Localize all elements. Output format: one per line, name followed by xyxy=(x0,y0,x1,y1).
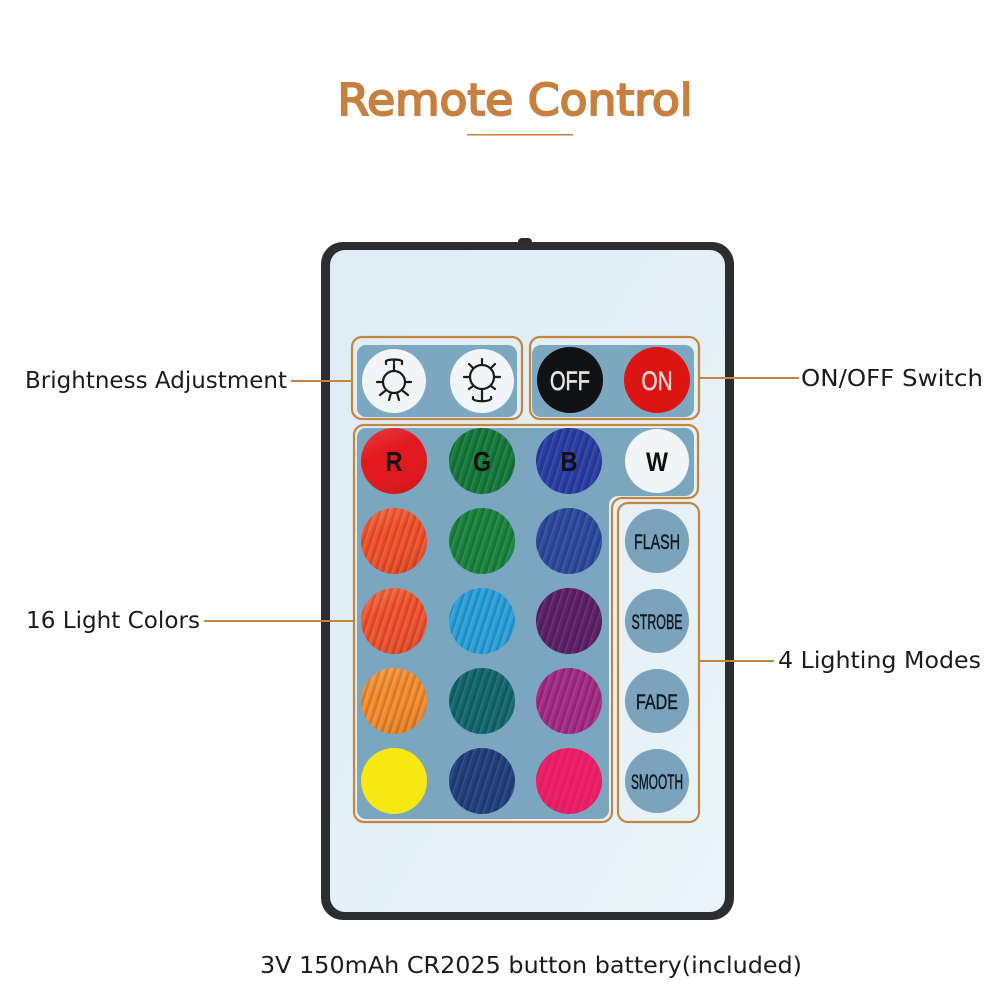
callout: 4 lighting modes: 4 Lighting Modes xyxy=(778,648,981,674)
callout: 16 light colors: 16 Light Colors xyxy=(26,608,200,634)
icon: brightness up button xyxy=(362,349,426,413)
button: B xyxy=(536,428,602,494)
button: FLASH: FLASH xyxy=(634,531,680,554)
panel: 4 lighting modes xyxy=(618,503,699,822)
callout: on/off switch: ON/OFF Switch xyxy=(801,366,983,392)
battery note: 3V 150mAh CR2025 button battery(included) xyxy=(260,953,802,979)
button: FADE: FADE xyxy=(636,691,678,714)
color buttons row 5 xyxy=(361,748,602,814)
button: B: B xyxy=(560,446,578,477)
button: R xyxy=(361,428,427,494)
icon: brightness down button xyxy=(450,349,514,413)
button: SMOOTH: SMOOTH xyxy=(631,771,683,794)
color buttons row 2 xyxy=(361,508,602,574)
off button: OFF xyxy=(550,366,590,396)
panel: brightness adjustment xyxy=(352,337,522,419)
button: W: W xyxy=(646,447,668,477)
off button xyxy=(537,347,603,413)
button: STROBE: STROBE xyxy=(632,611,682,634)
color buttons row 4 xyxy=(361,668,602,734)
button: SMOOTH xyxy=(625,749,689,813)
callout: brightness adjustment: Brightness Adjustment xyxy=(25,368,287,394)
button: FADE xyxy=(625,669,689,733)
panel: on/off switch xyxy=(530,337,699,419)
title: Remote Control xyxy=(338,75,692,126)
panel: 16 light colors xyxy=(354,425,698,822)
on button xyxy=(624,347,690,413)
button: W xyxy=(625,429,689,493)
button: FLASH xyxy=(625,509,689,573)
on button: ON xyxy=(642,366,672,396)
button: G: G xyxy=(473,446,491,477)
remote control body xyxy=(321,238,734,920)
button: R: R xyxy=(386,446,402,477)
button: STROBE xyxy=(625,589,689,653)
button: G xyxy=(449,428,515,494)
color buttons row 3 xyxy=(361,588,602,654)
